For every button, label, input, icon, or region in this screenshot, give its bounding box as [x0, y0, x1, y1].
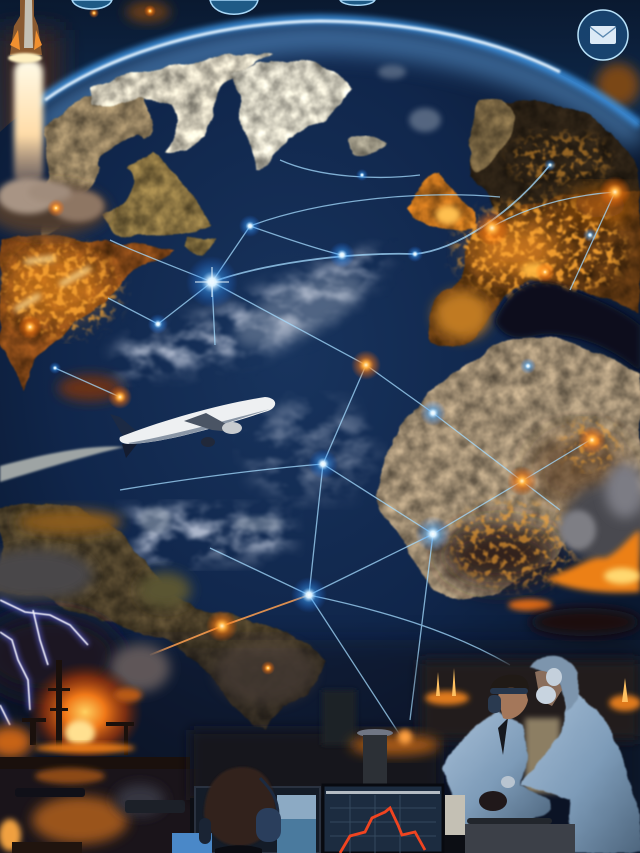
harbor water — [0, 768, 205, 853]
scientist: front — [442, 675, 551, 825]
network nodes: orange — [18, 176, 631, 747]
dark lower atmosphere — [5, 630, 636, 824]
network lines — [55, 160, 615, 735]
clouds: atlantic — [120, 65, 441, 565]
icon: envelope badge — [578, 10, 628, 60]
storm clouds: left — [0, 549, 170, 697]
sea: Mediterranean — [495, 282, 640, 372]
monitor: chart — [323, 785, 443, 853]
lab backdrop glow — [525, 718, 560, 793]
rocket launch — [8, 0, 43, 185]
land: Iceland — [347, 137, 388, 155]
airplane — [110, 397, 275, 458]
city skyline — [190, 660, 640, 800]
land: Mexico Gulf glow — [58, 375, 122, 401]
contrail — [0, 446, 124, 482]
land: continental Europe glowing — [428, 190, 640, 347]
land: South America — [0, 503, 326, 730]
smoke plume: rocket — [0, 178, 108, 236]
land: North America south, glowing — [0, 236, 175, 392]
harbor fire: left — [0, 662, 143, 762]
network nodes: blue — [49, 159, 597, 613]
atmosphere rim — [30, 19, 640, 125]
harbor lights — [35, 743, 135, 753]
operator with headset — [199, 767, 281, 853]
background: space — [0, 0, 640, 190]
scientist: back — [501, 656, 640, 853]
network line: orange link — [150, 595, 309, 655]
smoke and fire: right — [508, 462, 640, 636]
monitor: left — [172, 787, 320, 853]
land: Greenland — [232, 61, 350, 172]
limb haze — [40, 38, 640, 140]
dark desk and lower foreground — [190, 798, 470, 853]
land: Scandinavia and Russia — [469, 99, 640, 300]
port structures — [0, 660, 190, 769]
land: Africa — [378, 339, 640, 600]
lightning — [0, 600, 88, 725]
land: northern Canada — [38, 55, 272, 256]
icons: clipped top badges — [72, 0, 375, 14]
lab bench — [445, 795, 575, 853]
land: UK and Ireland — [405, 172, 476, 231]
